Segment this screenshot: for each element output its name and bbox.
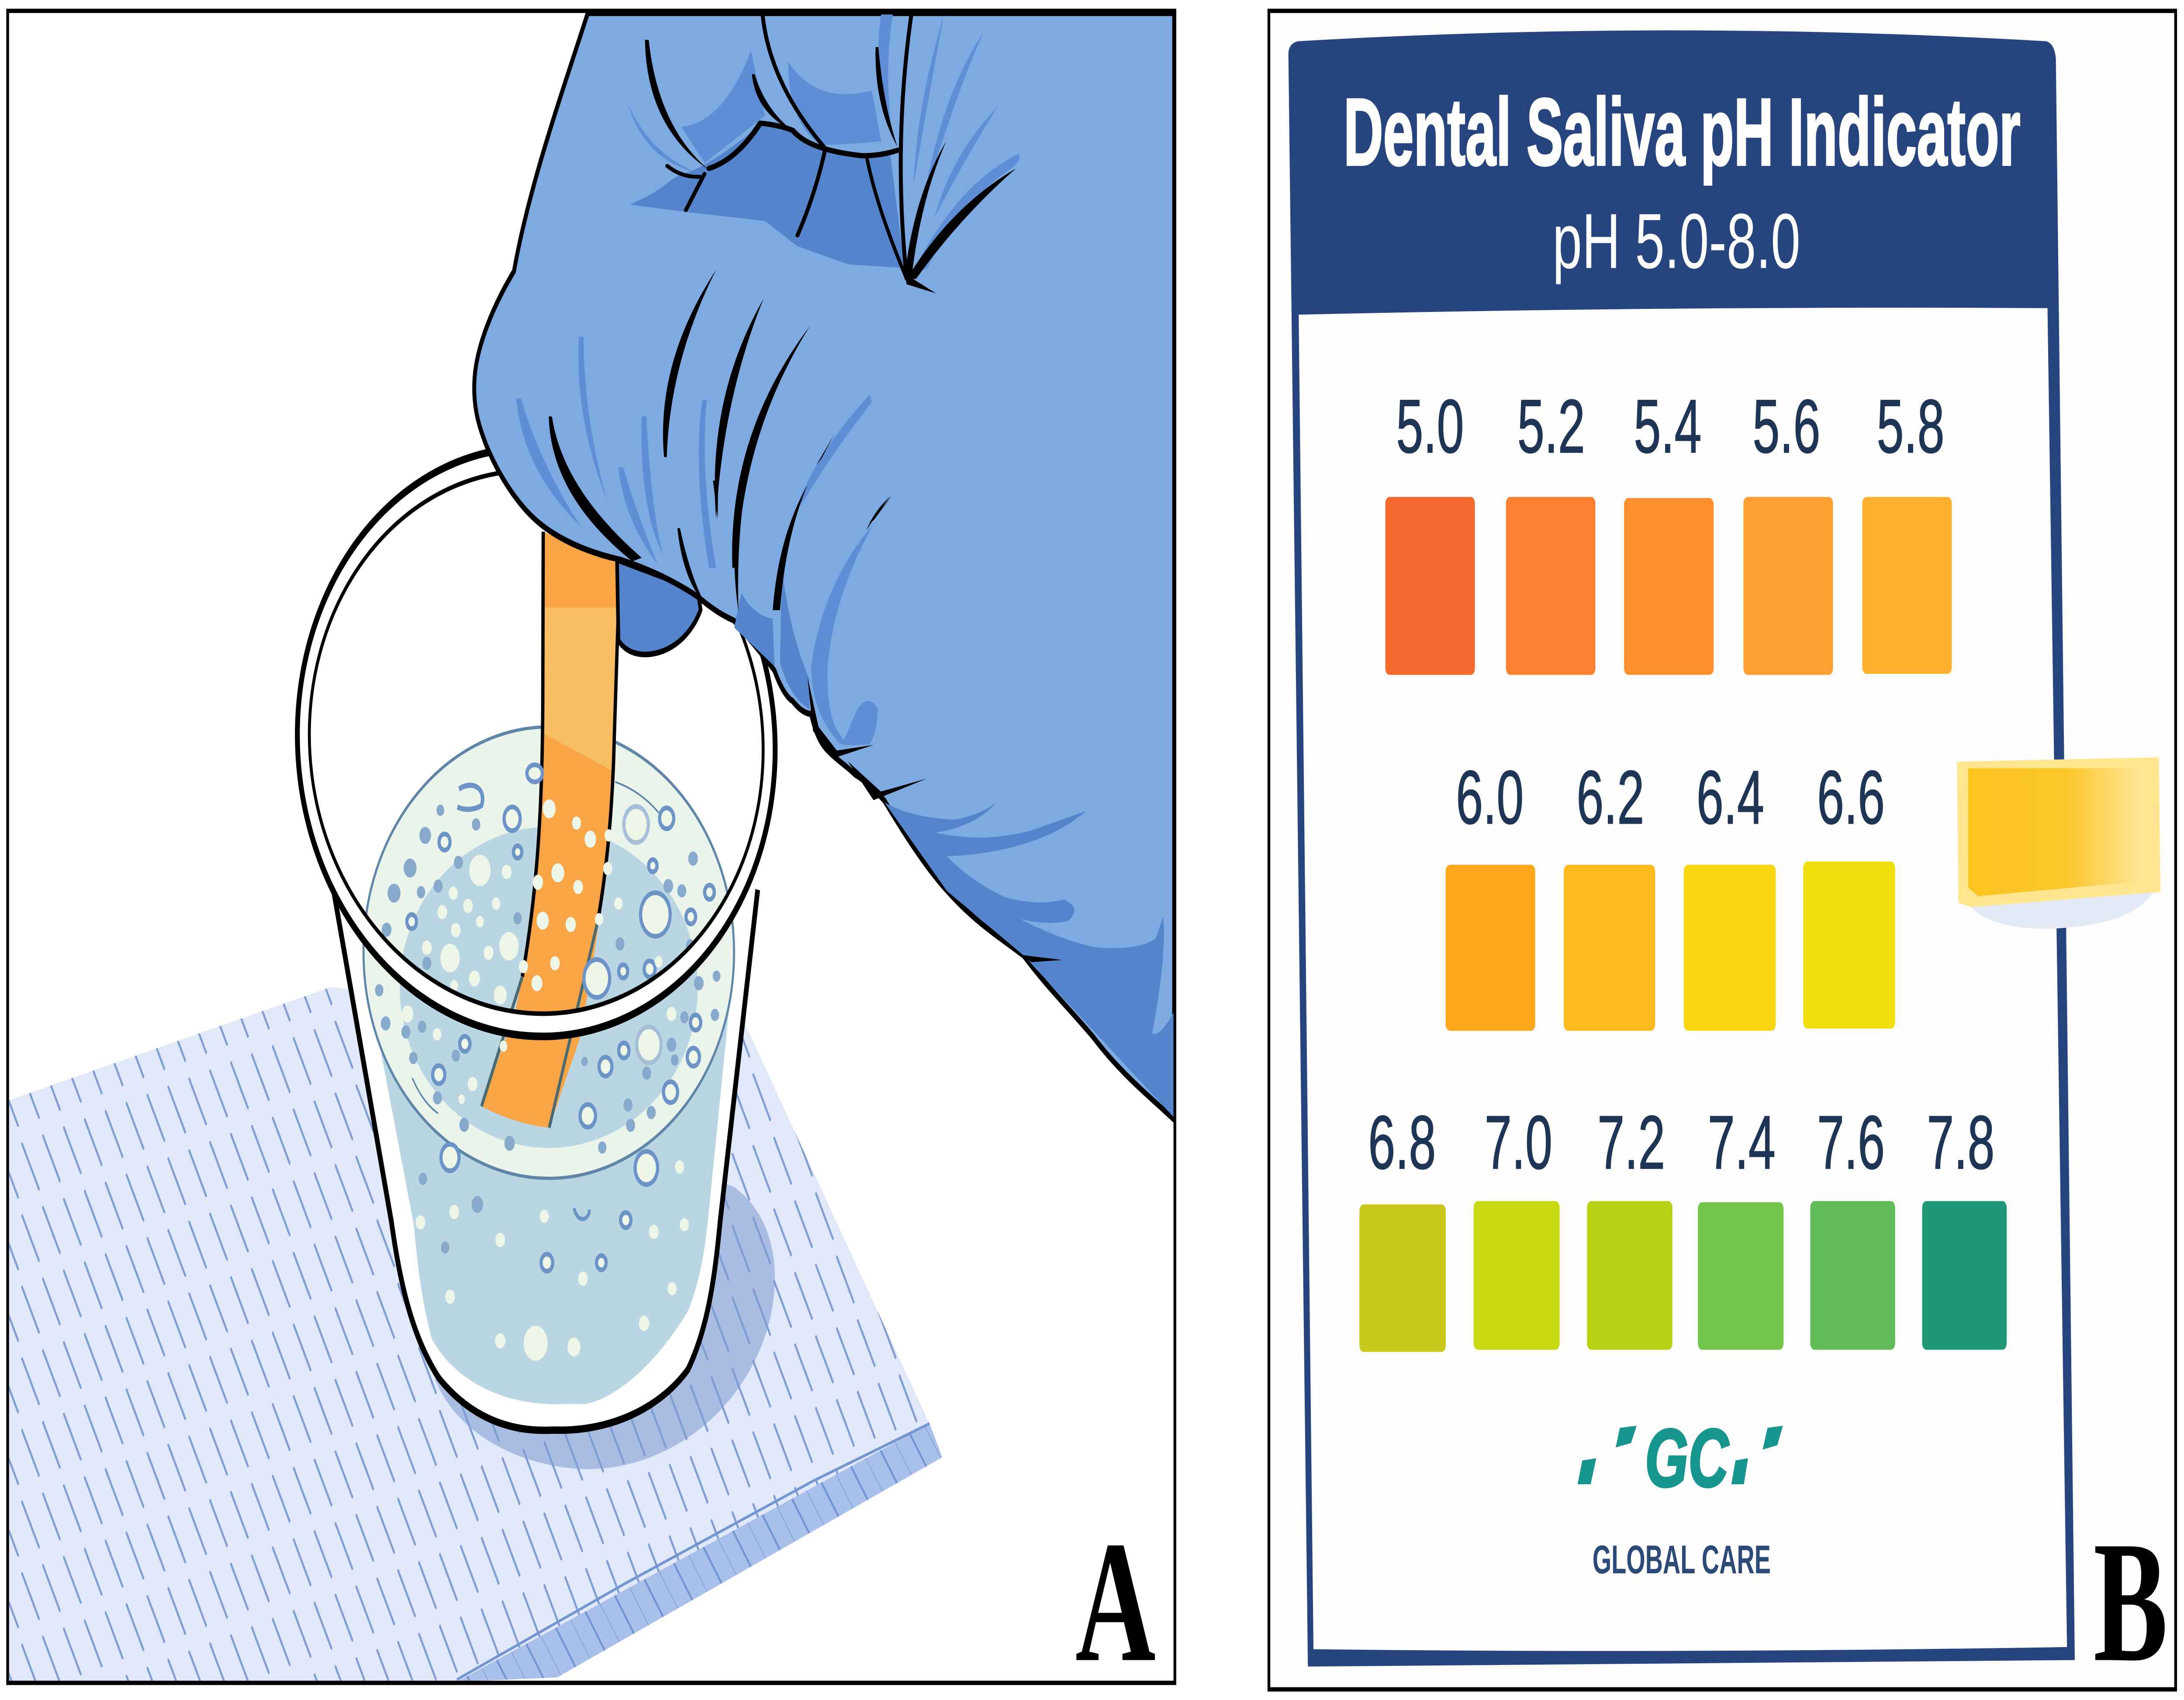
row 6.0 to 6.6 (1446, 755, 1895, 1031)
bubbles (375, 765, 720, 1361)
GLOBAL CARE caption: GLOBAL CARE (1593, 1537, 1771, 1582)
inner surface (400, 827, 698, 1148)
row 6.0 to 6.6: 6.2 (1576, 755, 1644, 840)
lower hand folds (677, 481, 1174, 1118)
row 6.8 to 7.8: 7.4 (1708, 1100, 1776, 1185)
blue nitrile glove (474, 13, 1174, 1120)
row 6.8 to 7.8 (1359, 1100, 2007, 1352)
indicator card (1289, 31, 2075, 1667)
row 6.0 to 6.6: 6.0 (1456, 755, 1524, 840)
panel A border (8, 11, 1175, 1683)
panel A: saliva cup with test strip (8, 11, 1175, 1698)
row 5.0 to 5.8: 5.6 (1752, 384, 1820, 468)
row 6.8 to 7.8: 6.8 (1368, 1100, 1436, 1185)
panel B: pH indicator chart (1269, 11, 2176, 1698)
card title: Dental Saliva pH Indicator (1344, 79, 2021, 185)
test strip (481, 532, 620, 1128)
row 5.0 to 5.8: 5.4 (1634, 384, 1701, 468)
row 6.8 to 7.8: 7.8 (1927, 1100, 1994, 1185)
hand silhouette (474, 13, 1174, 1120)
saliva liquid (363, 532, 734, 1404)
panel B border (1269, 11, 2176, 1690)
GC logo: GC (1645, 1412, 1729, 1504)
card subtitle: pH 5.0-8.0 (1552, 197, 1800, 284)
cup shadow (435, 1172, 775, 1469)
row 6.8 to 7.8: 7.2 (1597, 1100, 1665, 1185)
panel B letter: B (2094, 1506, 2168, 1698)
row 6.8 to 7.8: 7.0 (1485, 1100, 1552, 1185)
row 5.0 to 5.8 (1386, 384, 1952, 675)
row 6.0 to 6.6: 6.6 (1817, 755, 1885, 840)
row 6.0 to 6.6: 6.4 (1697, 755, 1764, 840)
row 6.8 to 7.8: 7.6 (1817, 1100, 1885, 1185)
test strip swatch (1957, 757, 2160, 929)
GC logo (1578, 1412, 1783, 1504)
plastic cup body (333, 890, 758, 1430)
upper hand folds (516, 14, 1019, 568)
thumb pad shadow (617, 560, 701, 654)
gauze fold (457, 1423, 942, 1682)
cup rim (288, 429, 785, 1055)
liquid surface (363, 727, 734, 1178)
row 5.0 to 5.8: 5.8 (1876, 384, 1945, 468)
row 5.0 to 5.8: 5.0 (1396, 384, 1464, 468)
gauze pad (9, 987, 942, 1682)
panel A letter: A (1075, 1506, 1156, 1698)
row 5.0 to 5.8: 5.2 (1517, 384, 1585, 468)
